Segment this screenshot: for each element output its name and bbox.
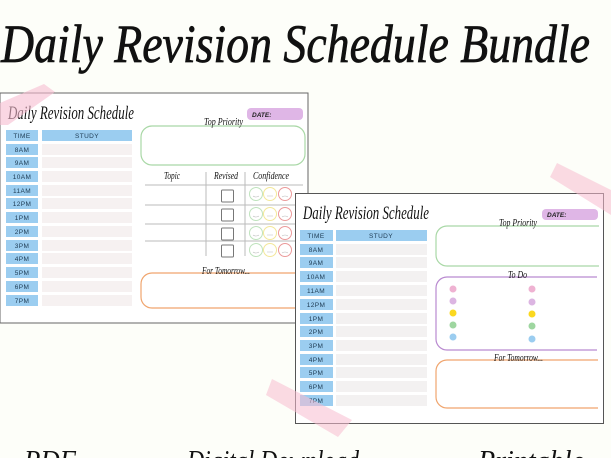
time column left: 4PM [15,256,29,263]
time column right: 7PM [309,398,323,405]
time column left: 12PM [13,201,31,208]
time column right: 9AM [309,260,323,267]
date tag [247,108,303,120]
confidence faces [250,188,292,256]
for tomorrow box right: For Tomorrow... [493,353,543,364]
for tomorrow box right [436,353,598,408]
time column left: 7PM [15,298,29,305]
time column left: 5PM [15,270,29,277]
time column left: 11AM [13,188,31,195]
for tomorrow box left [141,266,311,308]
time column left: 10AM [13,174,31,181]
time column right: 10AM [307,274,325,281]
time column right: 6PM [309,384,323,391]
date tag: DATE: [252,112,271,119]
panel: left schedule [0,84,311,323]
time column right: 3PM [309,343,323,350]
time column left: 3PM [15,243,29,250]
time column right: 11AM [307,288,325,295]
to do box right [436,270,597,350]
time column left: 9AM [15,160,29,167]
top priority box left [141,117,305,165]
to do bullets [450,286,536,342]
panel: right schedule [296,194,604,424]
time column left: 1PM [15,215,29,222]
decorative tape: left [0,84,55,125]
heading: right panel: Daily Revision Schedule [302,203,429,224]
heading: left panel: Daily Revision Schedule [7,103,134,124]
time column right [300,230,333,406]
study column left [42,130,132,306]
time column left: 2PM [15,229,29,236]
topic table left: Revised [213,171,239,182]
study column right [336,230,427,406]
time column left: 6PM [15,284,29,291]
time column left [6,130,38,306]
study column left: STUDY [75,133,99,140]
date tag right: DATE: [547,212,566,219]
time column right: TIME [307,233,325,240]
time column left: TIME [13,133,31,140]
topic table left [145,171,303,257]
time column right: 2PM [309,329,323,336]
decorative tape: bottom [266,379,352,437]
top priority box left: Top Priority [204,117,243,128]
to do box right: To Do [508,270,527,281]
topic table left: Topic [164,171,180,182]
time column right: 1PM [309,316,323,323]
top priority box right [436,218,599,266]
study column right: STUDY [369,233,393,240]
format labels [23,446,584,458]
time column left: 8AM [15,147,29,154]
time column right: 12PM [307,302,325,309]
decorative tape: top right [550,163,611,215]
date tag right [542,209,598,220]
topic table left: Confidence [253,171,289,182]
for tomorrow box left: For Tomorrow... [201,266,250,277]
time column right: 5PM [309,370,323,377]
top priority box right: Top Priority [499,218,537,229]
time column right: 4PM [309,357,323,364]
time column right: 8AM [309,247,323,254]
